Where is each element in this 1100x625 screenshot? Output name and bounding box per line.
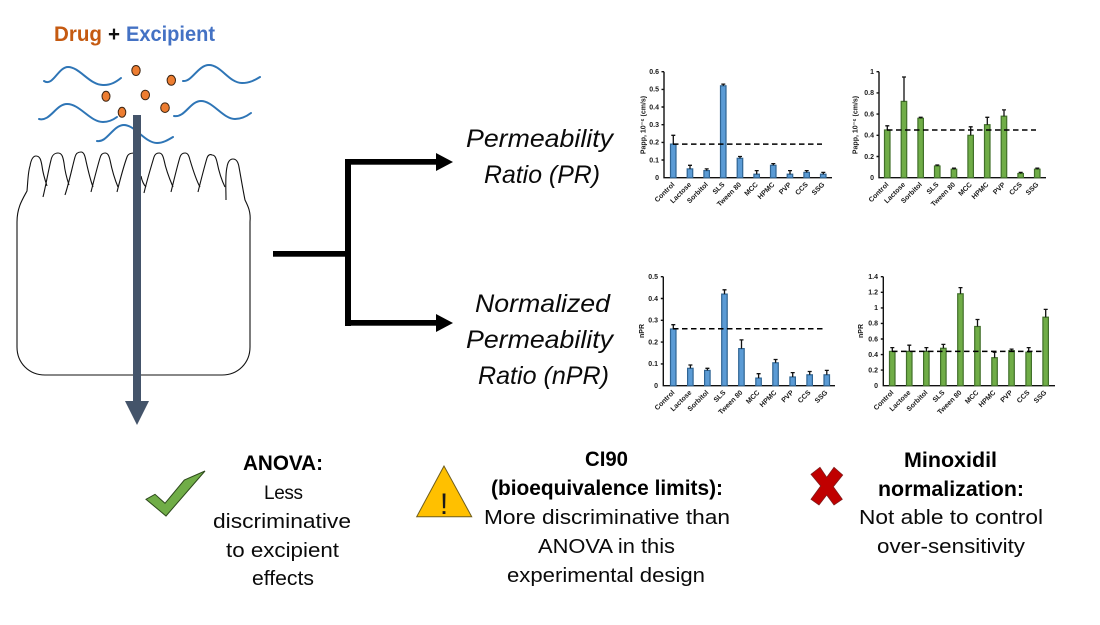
bar chart: nPR, green, bottom right: 1 xyxy=(874,305,878,312)
icon: green check mark xyxy=(146,471,205,516)
text block: ANOVA xyxy=(213,452,351,590)
bar chart: PR, blue, top left: Lactose xyxy=(669,181,693,205)
title: Drug + Excipient: Drug xyxy=(54,23,102,46)
bar chart: nPR, green, bottom right: 0 xyxy=(874,383,878,390)
title: Drug + Excipient: Excipient xyxy=(126,23,215,46)
bar chart: PR, blue, top left: SSG xyxy=(811,181,827,197)
bar chart: PR, blue, top left: 0.2 xyxy=(649,140,659,147)
bar chart: nPR, blue, bottom left: Lactose xyxy=(670,389,693,413)
bar chart: nPR, blue, bottom left: 0.3 xyxy=(648,318,658,325)
title: Drug + Excipient xyxy=(54,23,215,46)
bar chart: PR, green, top right: 0.2 xyxy=(864,154,874,161)
bar chart: PR, green, top right: 0.8 xyxy=(864,90,874,97)
bar chart: nPR, green, bottom right: Sorbitol xyxy=(906,389,929,413)
heading: Permeability Ratio (PR): Ratio (PR) xyxy=(484,161,600,189)
bar chart: PR, blue, top left: HPMC xyxy=(757,181,776,201)
bar chart: nPR, blue, bottom left: CCS xyxy=(797,389,813,405)
heading: Normalized Permeability Ratio (nPR): Ratio (nPR) xyxy=(478,362,609,390)
bar chart: nPR, green, bottom right: 0.2 xyxy=(868,367,878,374)
bar chart: PR, blue, top left xyxy=(640,69,832,208)
text block: CI90: CI90 xyxy=(585,448,628,471)
text block: ANOVA: Less xyxy=(264,483,303,504)
text block: Minoxidil normalization: Not able to control xyxy=(859,506,1043,529)
bar chart: PR, green, top right: Sorbitol xyxy=(900,181,924,205)
bar chart: nPR, blue, bottom left: Sorbitol xyxy=(687,389,710,413)
bar chart: nPR, blue, bottom left: SLS xyxy=(713,389,728,404)
text block: Minoxidil normalization: Minoxidil xyxy=(904,449,997,472)
bar chart: nPR, blue, bottom left: 0.4 xyxy=(648,296,658,303)
bar chart: PR, green, top right: 0.6 xyxy=(864,111,874,118)
bar chart: nPR, green, bottom right: 0.4 xyxy=(868,352,878,359)
bar chart: PR, green, top right: Lactose xyxy=(883,181,907,205)
bar chart: PR, green, top right: CCS xyxy=(1008,181,1024,197)
bar chart: PR, green, top right: Papp, 10⁻⁶ (cm/s) xyxy=(852,96,860,154)
icon: excipient waves xyxy=(39,65,260,143)
arrow: transport through cell layer xyxy=(125,115,149,425)
bar chart: nPR, blue, bottom left: Control xyxy=(654,389,676,412)
text block: CI90: More discriminative than xyxy=(484,506,730,529)
text block: Minoxidil normalization xyxy=(859,449,1043,558)
bar chart: nPR, blue, bottom left: PVP xyxy=(781,389,796,404)
bar chart: PR, blue, top left: Control xyxy=(654,181,676,204)
bar chart: nPR, blue, bottom left: 0.1 xyxy=(648,361,658,368)
bar chart: PR, green, top right: SSG xyxy=(1025,181,1041,197)
bar chart: nPR, green, bottom right: 1.2 xyxy=(868,290,878,297)
text block: CI90: experimental design xyxy=(507,564,705,587)
bar chart: nPR, blue, bottom left: HPMC xyxy=(759,389,778,409)
bar chart: nPR, green, bottom right: 1.4 xyxy=(868,274,878,281)
bar chart: PR, green, top right: MCC xyxy=(958,181,974,198)
text block: ANOVA: ANOVA: xyxy=(243,452,323,475)
bar chart: nPR, blue, bottom left: 0.2 xyxy=(648,339,658,346)
bar chart: nPR, green, bottom right xyxy=(858,274,1055,416)
arrow: branching connector to two metrics xyxy=(273,153,453,332)
bar chart: PR, blue, top left: 0.5 xyxy=(649,87,659,94)
heading: Normalized Permeability Ratio (nPR): Normalized xyxy=(475,290,611,318)
text block: ANOVA: to excipient xyxy=(226,539,339,562)
bar chart: nPR, green, bottom right: MCC xyxy=(964,389,980,406)
icon: drug particles xyxy=(102,66,176,117)
icon: warning triangle xyxy=(417,466,472,521)
bar chart: PR, green, top right: PVP xyxy=(992,181,1007,196)
bar chart: PR, blue, top left: CCS xyxy=(794,181,810,197)
title: Drug + Excipient: + xyxy=(108,23,120,46)
bar chart: PR, blue, top left: 0.4 xyxy=(649,104,659,111)
bar chart: nPR, green, bottom right: SLS xyxy=(932,389,947,404)
bar chart: nPR, blue, bottom left: 0 xyxy=(654,383,658,390)
heading: Normalized Permeability Ratio (nPR): Permeability xyxy=(466,326,615,354)
bar chart: PR, blue, top left: Papp, 10⁻⁶ (cm/s) xyxy=(640,96,648,154)
bar chart: PR, green, top right: Control xyxy=(868,181,890,204)
bar chart: nPR, green, bottom right: PVP xyxy=(1000,389,1015,404)
bar chart: PR, blue, top left: 0.6 xyxy=(649,69,659,76)
text block: ANOVA: discriminative xyxy=(213,510,351,533)
bar chart: nPR, blue, bottom left xyxy=(639,274,835,416)
text block: CI90: ANOVA in this xyxy=(538,535,675,558)
bar chart: PR, green, top right: HPMC xyxy=(971,181,990,201)
bar chart: nPR, green, bottom right: Lactose xyxy=(889,389,912,413)
text block: ANOVA: effects xyxy=(252,567,314,590)
bar chart: nPR, green, bottom right: HPMC xyxy=(978,389,997,409)
bar chart: nPR, blue, bottom left: MCC xyxy=(745,389,761,406)
heading: Permeability Ratio (PR) xyxy=(466,125,615,189)
bar chart: nPR, green, bottom right: nPR xyxy=(858,324,865,338)
bar chart: nPR, blue, bottom left: Tween 80 xyxy=(718,389,744,416)
text block: Minoxidil normalization: over-sensitivity xyxy=(877,535,1026,558)
bar chart: PR, blue, top left: Sorbitol xyxy=(686,181,710,205)
text block: CI90: (bioequivalence limits): xyxy=(491,477,723,500)
icon: warning triangle: ! xyxy=(440,488,448,521)
bar chart: nPR, green, bottom right: Tween 80 xyxy=(937,389,963,416)
bar chart: PR, green, top right: SLS xyxy=(926,181,941,196)
text block: CI90 xyxy=(484,448,730,587)
bar chart: nPR, green, bottom right: 0.6 xyxy=(868,336,878,343)
bar chart: nPR, green, bottom right: CCS xyxy=(1016,389,1032,405)
bar chart: PR, blue, top left: Tween 80 xyxy=(716,181,743,208)
bar chart: nPR, green, bottom right: 0.8 xyxy=(868,321,878,328)
bar chart: nPR, blue, bottom left: 0.5 xyxy=(648,274,658,281)
bar chart: nPR, blue, bottom left: nPR xyxy=(639,324,646,338)
bar chart: PR, blue, top left: PVP xyxy=(778,181,793,196)
bar chart: PR, green, top right: 0 xyxy=(870,175,874,182)
bar chart: PR, green, top right: 0.4 xyxy=(864,133,874,140)
bar chart: nPR, green, bottom right: SSG xyxy=(1033,389,1049,405)
bar chart: nPR, blue, bottom left: SSG xyxy=(814,389,830,405)
cell monolayer outline with villi xyxy=(17,152,250,375)
bar chart: PR, blue, top left: SLS xyxy=(712,181,727,196)
bar chart: nPR, green, bottom right: Control xyxy=(873,389,895,412)
bar chart: PR, blue, top left: MCC xyxy=(744,181,760,198)
bar chart: PR, blue, top left: 0.1 xyxy=(649,157,659,164)
text block: Minoxidil normalization: normalization: xyxy=(878,478,1024,501)
bar chart: PR, blue, top left: 0.3 xyxy=(649,122,659,129)
heading: Permeability Ratio (PR): Permeability xyxy=(466,125,615,153)
heading: Normalized Permeability Ratio (nPR) xyxy=(466,290,615,390)
bar chart: PR, blue, top left: 0 xyxy=(655,175,659,182)
bar chart: PR, green, top right xyxy=(852,69,1046,208)
bar chart: PR, green, top right: 1 xyxy=(870,69,874,76)
icon: red cross xyxy=(811,467,843,505)
bar chart: PR, green, top right: Tween 80 xyxy=(930,181,957,208)
